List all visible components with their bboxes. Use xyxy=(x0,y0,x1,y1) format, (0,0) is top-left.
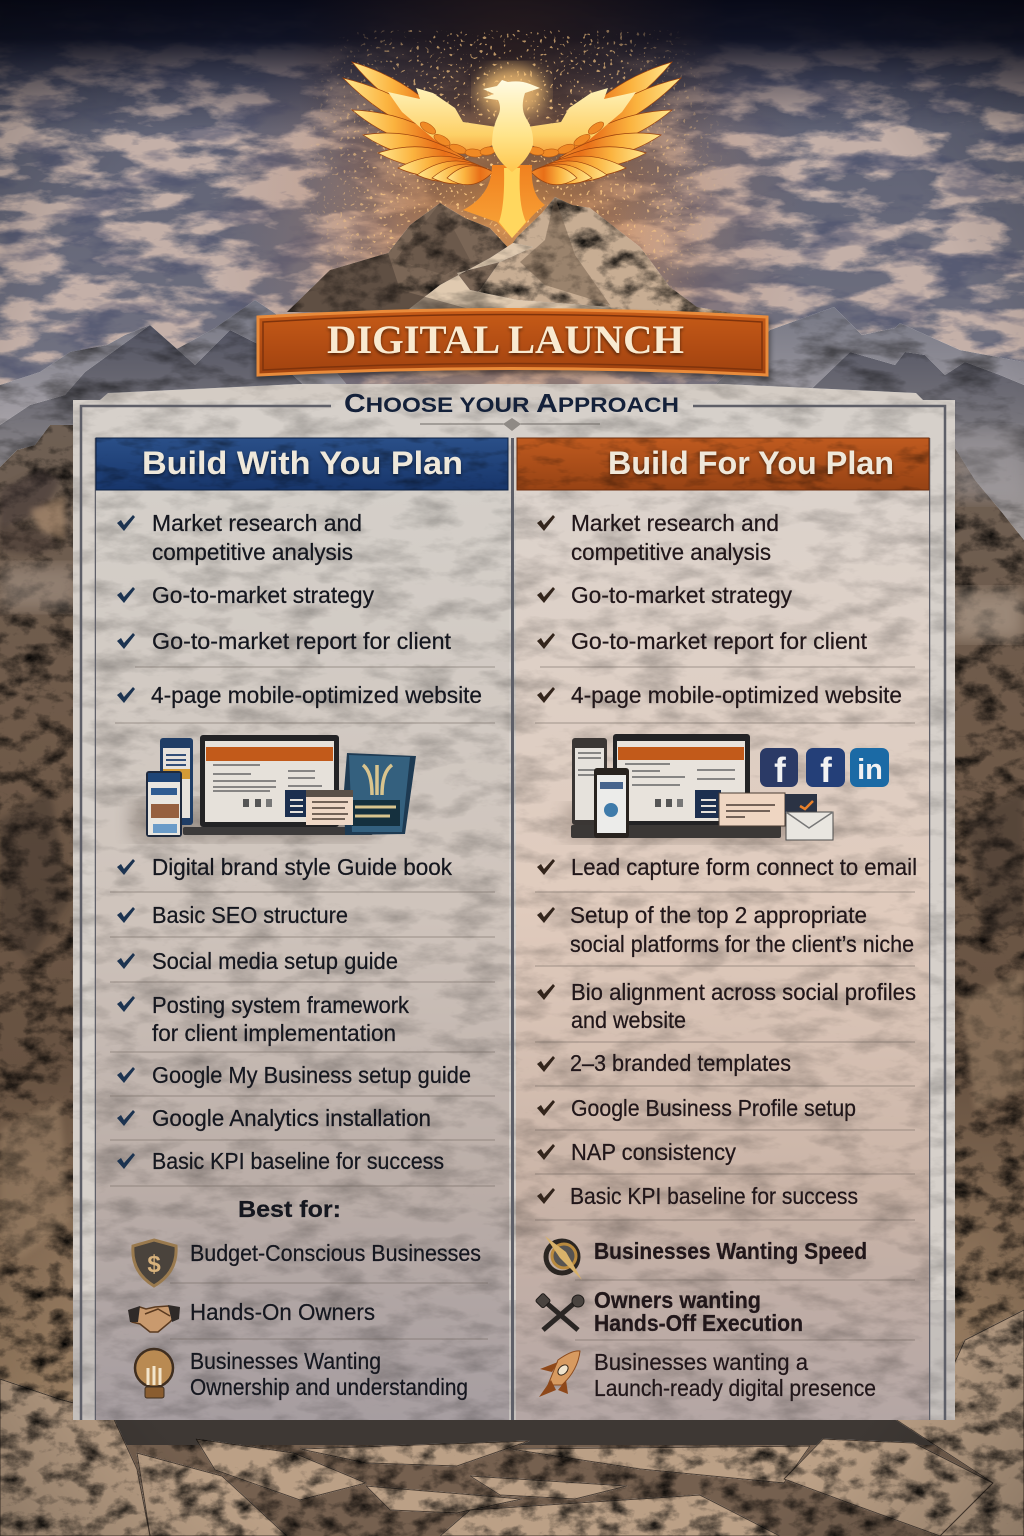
icon: crossed tools xyxy=(535,1293,584,1330)
right checklist: top xyxy=(535,510,915,723)
left plan column xyxy=(96,438,508,1400)
best for: launch-ready: Businesses wanting a xyxy=(594,1349,808,1375)
background: sky and clouds xyxy=(0,0,1024,385)
right checklist: top: Go-to-market strategy xyxy=(571,582,792,608)
left checklist: top: 4-page mobile-optimized website xyxy=(151,682,482,708)
left checklist: bottom: Basic SEO structure xyxy=(152,902,348,928)
left checklist: bottom: Google My Business setup guide xyxy=(152,1062,471,1088)
left checklist: top: Go-to-market strategy xyxy=(152,582,374,608)
frame rules xyxy=(81,406,945,1420)
left checklist: top: Go-to-market report for client xyxy=(152,628,452,654)
left column background xyxy=(96,490,509,1420)
ornament under subtitle xyxy=(420,418,600,431)
icon: dollar shield xyxy=(133,1240,176,1286)
central mountain peak xyxy=(287,197,750,316)
right checklist: bottom: 2–3 branded templates xyxy=(570,1050,791,1076)
best for: launch-ready: Launch-ready digital presence xyxy=(594,1375,876,1401)
best for: speed: Businesses Wanting Speed xyxy=(594,1238,867,1264)
best for: hands-off: Owners wanting xyxy=(594,1287,761,1313)
phoenix tail xyxy=(463,165,545,238)
right checklist: top: Go-to-market report for client xyxy=(571,628,868,654)
right header: Build For You Plan xyxy=(608,445,894,481)
left checklist: bottom: Social media setup guide xyxy=(152,948,398,974)
left checklist: bottom: Google Analytics installation xyxy=(152,1105,431,1131)
icon: linkedin xyxy=(850,748,889,787)
right checklist: bottom: Bio alignment across social profiles xyxy=(571,979,916,1005)
right checklist: bottom: Lead capture form connect to email xyxy=(571,854,917,880)
right checklist: bottom: NAP consistency xyxy=(571,1139,736,1165)
best for: budget: Budget-Conscious Businesses xyxy=(190,1240,481,1266)
right checklist: top: 4-page mobile-optimized website xyxy=(571,682,902,708)
left checklist: bottom: Basic KPI baseline for success xyxy=(152,1148,444,1174)
main stone panel xyxy=(73,384,955,1420)
icon: handshake xyxy=(128,1305,180,1332)
icon: compass xyxy=(545,1236,582,1280)
right header xyxy=(517,438,929,490)
left checklist: top: competitive analysis xyxy=(152,539,353,565)
best for: hands-on: Hands-On Owners xyxy=(190,1299,375,1325)
phoenix xyxy=(343,62,681,238)
best for: launch-ready xyxy=(594,1349,876,1401)
right checklist: bottom: Basic KPI baseline for success xyxy=(570,1183,858,1209)
phoenix body and head xyxy=(483,80,540,172)
best for heading: Best for: xyxy=(238,1196,341,1222)
left checklist: bottom: for client implementation xyxy=(152,1020,396,1046)
best for: ownership: Businesses Wanting xyxy=(190,1348,381,1374)
right checklist: top: competitive analysis xyxy=(571,539,771,565)
icon: facebook second xyxy=(806,748,845,790)
title banner xyxy=(255,310,770,381)
background: side rock cliffs xyxy=(0,425,1024,1450)
left checklist: bottom: Digital brand style Guide book xyxy=(152,854,452,880)
right checklist: bottom xyxy=(535,854,917,1220)
phoenix left wing xyxy=(343,62,497,185)
background: distant misty mountains xyxy=(0,300,1024,660)
icon: dollar shield: $ xyxy=(147,1251,161,1278)
best for: hands-off xyxy=(594,1287,803,1336)
best for: hands-off: Hands-Off Execution xyxy=(594,1310,803,1336)
title text: DIGITAL LAUNCH xyxy=(327,317,684,362)
right checklist: bottom: Setup of the top 2 appropriate xyxy=(570,902,867,928)
devices illustration with brand guide book xyxy=(130,735,416,840)
right checklist: bottom: Google Business Profile setup xyxy=(571,1095,856,1121)
right checklist: bottom: social platforms for the client’s niche xyxy=(570,931,914,957)
best for: ownership: Ownership and understanding xyxy=(190,1374,468,1400)
phoenix right wing xyxy=(527,62,681,185)
icon: rocket xyxy=(539,1351,580,1397)
left checklist: top: Market research and xyxy=(152,510,362,536)
right column background xyxy=(516,490,929,1420)
left checklist: bottom xyxy=(110,854,495,1186)
right checklist: bottom: and website xyxy=(571,1007,686,1033)
icon: light bulb xyxy=(135,1349,173,1398)
devices illustration with social icons and envelope xyxy=(565,734,889,841)
left header xyxy=(96,438,508,490)
left header: Build With You Plan xyxy=(142,445,463,481)
icon: facebook: f xyxy=(774,751,786,790)
left checklist: top xyxy=(115,510,495,723)
subtitle: CHOOSE YOUR APPROACH xyxy=(344,388,679,418)
right plan column xyxy=(517,438,929,1401)
best for: ownership xyxy=(190,1348,468,1400)
left checklist: bottom: Posting system framework xyxy=(152,992,409,1018)
icon: linkedin: in xyxy=(857,754,883,786)
icon: facebook xyxy=(760,748,798,790)
icon: facebook second: f xyxy=(820,751,832,790)
right checklist: top: Market research and xyxy=(571,510,779,536)
